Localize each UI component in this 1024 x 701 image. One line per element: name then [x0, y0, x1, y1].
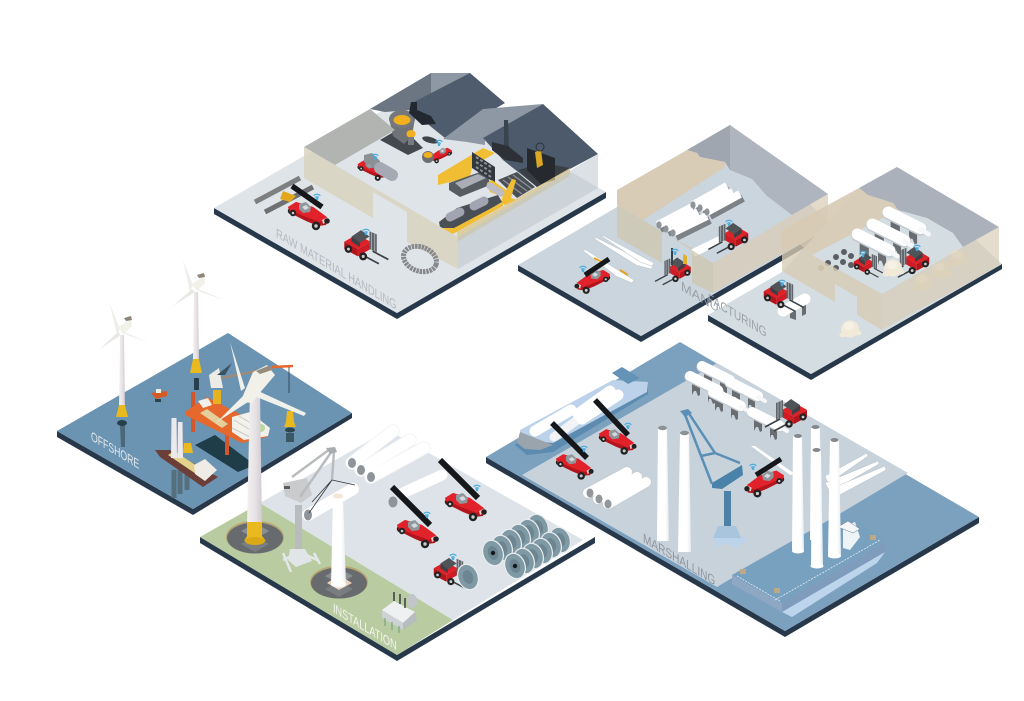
truck with cable drum	[434, 558, 482, 593]
icon: wifi	[914, 245, 920, 250]
icon: wifi	[672, 249, 678, 254]
translucent right wall	[458, 154, 598, 269]
reach stacker with blade	[744, 446, 795, 497]
hub	[840, 320, 862, 338]
hubs	[912, 250, 970, 290]
water	[486, 342, 979, 631]
label: offshore: OFFSHORE	[91, 428, 139, 472]
pipes	[586, 472, 646, 508]
panel: raw material handling	[214, 73, 606, 319]
foundation pit with turbine base	[226, 520, 284, 554]
turbine two	[173, 260, 225, 390]
crane	[283, 447, 355, 572]
reach stacker one	[388, 487, 439, 548]
platform base	[57, 413, 352, 515]
melting shop machines	[438, 120, 570, 242]
jagged roof	[687, 125, 828, 215]
panel: installation	[200, 430, 595, 661]
reach stacker on quay	[552, 423, 594, 480]
forklift	[655, 248, 691, 285]
foreground turbine	[215, 342, 306, 545]
small parts	[818, 249, 854, 271]
tower sections on barge	[792, 425, 841, 568]
tower sections	[657, 426, 691, 552]
platform base	[518, 226, 832, 342]
forklift with nacelle	[764, 281, 806, 320]
truck with ladle	[422, 148, 452, 163]
icon: wifi	[450, 554, 456, 560]
icon: wifi	[372, 154, 378, 160]
nacelles on stands	[857, 212, 929, 266]
side wall	[782, 188, 898, 255]
tug boat	[151, 389, 167, 402]
blades	[582, 235, 654, 283]
platform base	[708, 264, 1002, 380]
foundation pit with tower	[310, 566, 368, 598]
icon: wifi	[424, 512, 430, 518]
barge	[732, 512, 885, 617]
blue port crane	[680, 409, 747, 548]
icon: wifi	[580, 266, 586, 272]
platform floor	[518, 125, 832, 336]
jack-up rig	[185, 363, 293, 455]
reach stacker two	[440, 460, 487, 521]
label: installation: INSTALLATION	[333, 600, 397, 653]
reach stacker	[280, 186, 330, 230]
translucent side wall	[304, 109, 395, 165]
icon: wifi	[860, 251, 866, 256]
platform base	[200, 537, 595, 661]
front wall	[782, 230, 882, 330]
icon: wifi	[314, 194, 320, 200]
turbine one	[100, 304, 150, 447]
forklift with pipe	[693, 223, 748, 253]
sea surface	[57, 333, 352, 509]
icon: wifi	[779, 280, 785, 286]
pipes	[348, 431, 424, 482]
nacelles on stands	[690, 366, 787, 440]
forklift	[344, 230, 388, 264]
truck with hub	[882, 247, 929, 277]
icon: wifi	[474, 485, 480, 490]
factory roofs	[370, 73, 598, 187]
icon: wifi	[363, 229, 369, 234]
icon: wifi	[750, 464, 756, 470]
panel: offshore	[57, 260, 352, 515]
pipe by stacker	[403, 475, 442, 493]
label: manufacturing part two: FACTURING	[708, 290, 766, 340]
tower	[247, 392, 262, 526]
steel ring	[400, 242, 440, 276]
installation vessel	[155, 418, 218, 498]
reach stacker	[574, 259, 610, 294]
transition piece	[284, 411, 296, 442]
forklift with nacelle	[765, 399, 807, 431]
side wall	[617, 150, 725, 220]
front wall	[617, 205, 713, 293]
ship	[515, 367, 648, 455]
cable drums	[479, 511, 574, 582]
blades	[825, 453, 886, 498]
icon: wifi	[581, 446, 587, 452]
transformer	[382, 592, 417, 633]
translucent front wall	[304, 147, 458, 269]
panel: manufacturing nacelles	[708, 167, 1002, 380]
label: raw material handling: RAW MATERIAL HANDLING	[276, 225, 396, 313]
quay	[522, 363, 908, 587]
pipe under crane	[304, 489, 353, 520]
blades	[215, 342, 306, 424]
platform floor	[708, 167, 1002, 374]
stacked pipes	[656, 186, 743, 237]
right wall	[713, 194, 828, 293]
reach stacker on quay	[595, 400, 637, 455]
raw material platform floor	[214, 87, 606, 313]
jagged roof	[859, 167, 999, 247]
icon: wifi	[726, 220, 732, 226]
icon: ladle machine	[380, 102, 439, 155]
storage floor	[260, 430, 583, 620]
rig shadow	[195, 435, 255, 472]
panel: manufacturing towers and blades	[518, 125, 832, 342]
white tower section	[327, 494, 352, 590]
truck	[854, 253, 885, 277]
nacelle	[242, 365, 275, 403]
label: marshalling: MARSHALLING	[643, 530, 715, 589]
right wall	[882, 227, 999, 330]
raw material platform base	[214, 192, 606, 319]
panel: marshalling	[486, 342, 979, 637]
coastal ground	[200, 503, 453, 655]
icon: wifi	[436, 140, 442, 146]
icon: wifi	[625, 423, 631, 428]
truck with billet	[357, 153, 392, 181]
platform base	[486, 457, 979, 637]
steel beams	[255, 178, 313, 212]
yellow foundation	[244, 522, 266, 545]
label: manufacturing part one: MANU	[681, 278, 719, 316]
